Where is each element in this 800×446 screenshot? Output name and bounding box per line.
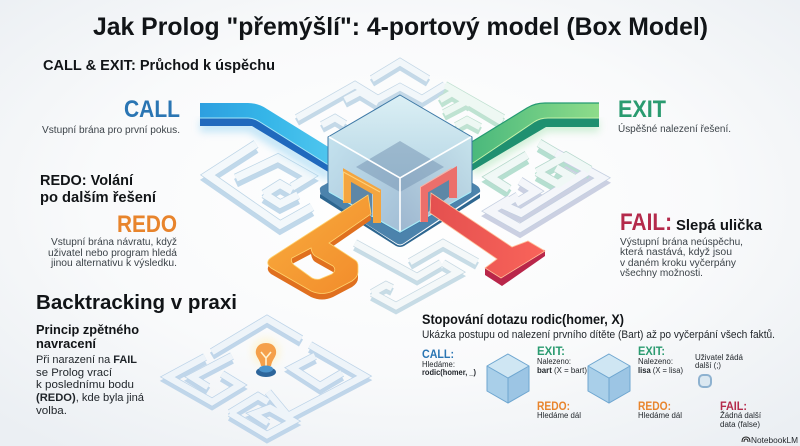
FAIL label: Slepá ulička [676, 217, 763, 234]
trace: FAIL [720, 399, 762, 429]
doorway arch: FAIL [420, 168, 453, 222]
icon: small cube 2 [588, 354, 630, 403]
text block: backtracking principle: Princip zpětného [36, 323, 139, 337]
trace: user asks for more: Uživatel žádá [695, 353, 744, 362]
trace: first REDO: REDO: [537, 399, 570, 413]
title: Jak Prolog "přemýšlí": 4-portový model (Box Model) [93, 13, 708, 41]
REDO label: Vstupní brána návratu, když [51, 237, 177, 248]
arrow: EXIT pipe [470, 103, 599, 172]
doorway arch: REDO [344, 172, 380, 223]
arrow: CALL pipe [200, 103, 330, 176]
CALL label: Vstupní brána pro první pokus. [42, 125, 180, 136]
text block: backtracking principle: (REDO), kde byla jiná [36, 392, 145, 404]
trace: second EXIT: EXIT: [638, 344, 665, 358]
maze: bottom [355, 243, 477, 310]
trace: user asks for more [695, 353, 744, 370]
trace: second EXIT: lisa (X = lisa) [638, 366, 683, 375]
cube platform [320, 140, 480, 247]
trace: second EXIT: Nalezeno: [638, 357, 673, 366]
arrow: REDO orange loop [268, 195, 371, 300]
trace: user asks for more: další (;) [695, 361, 721, 370]
text block: backtracking principle: navracení [36, 337, 97, 351]
maze: left [208, 144, 312, 230]
REDO label: jinou alternativu k výsledku. [50, 258, 177, 269]
text block: backtracking principle: Při narazení na FAIL [36, 354, 137, 366]
FAIL label: FAIL: [620, 209, 672, 236]
maze: top [297, 62, 503, 131]
EXIT label [618, 96, 731, 135]
maze: right [490, 143, 602, 233]
maze: backtracking [168, 319, 364, 439]
text block: backtracking principle: volba. [36, 405, 67, 417]
doorway opening: REDO [350, 180, 372, 216]
heading: REDO: REDO: Volání [40, 172, 134, 189]
EXIT label: Úspěšné nalezení řešení. [618, 122, 731, 135]
FAIL label: Výstupní brána neúspěchu, [620, 237, 743, 248]
icon: light bulb [252, 338, 280, 377]
text block: backtracking principle: k poslednímu bodu [36, 379, 134, 391]
text block: backtracking principle [36, 323, 145, 417]
NotebookLM logo: NotebookLM [751, 435, 798, 445]
glass cube [328, 95, 472, 233]
trace: FAIL: Žádná další [720, 411, 762, 420]
trace: first EXIT: Nalezeno: [537, 357, 571, 366]
trace: FAIL: FAIL: [720, 399, 747, 413]
CALL label: CALL [124, 96, 180, 123]
REDO label: REDO [117, 211, 177, 238]
text block: backtracking principle: se Prolog vrací [36, 367, 112, 379]
doorway opening: FAIL [428, 178, 450, 212]
trace: first REDO: Hledáme dál [537, 411, 581, 420]
trace: second EXIT [638, 344, 683, 375]
trace: first EXIT [537, 344, 587, 375]
heading: CALL and EXIT: CALL & EXIT: Průchod k úspěchu [43, 58, 275, 74]
FAIL label [620, 209, 763, 279]
trace: second REDO: REDO: [638, 399, 671, 413]
trace: FAIL: data (false) [720, 420, 760, 429]
trace: second REDO: Hledáme dál [638, 411, 682, 420]
trace: first EXIT: EXIT: [537, 344, 565, 358]
arrow: FAIL red T [430, 193, 545, 286]
trace: CALL step: rodic(homer, _) [422, 368, 476, 377]
FAIL label: v daném kroku vyčerpány [620, 258, 736, 269]
heading: Backtracking: Backtracking v praxi [36, 292, 237, 314]
heading: REDO: po dalším řešení [40, 189, 157, 206]
REDO label [48, 211, 177, 269]
trace: second REDO [638, 399, 682, 420]
trace: first REDO [537, 399, 581, 420]
icon: small rounded button [699, 375, 711, 387]
trace: CALL step [422, 347, 476, 377]
trace: first EXIT: bart (X = bart) [537, 366, 587, 375]
trace: CALL step: Hledáme: [422, 360, 455, 369]
text block: trace description: Ukázka postupu od nalezení prvního dítěte (Bart) až po vyčerpání všech faktů. [422, 329, 775, 341]
heading: query trace: Stopování dotazu rodic(homer, X) [422, 311, 624, 327]
FAIL label: která nastává, když jsou [620, 247, 732, 258]
trace: CALL step: CALL: [422, 347, 454, 361]
EXIT label: EXIT [618, 96, 666, 123]
icon: small cube 1 [487, 354, 529, 403]
REDO label: uživatel nebo program hledá [48, 248, 177, 259]
heading: REDO [40, 172, 157, 206]
CALL label [42, 96, 180, 136]
FAIL label: všechny možnosti. [620, 268, 703, 279]
